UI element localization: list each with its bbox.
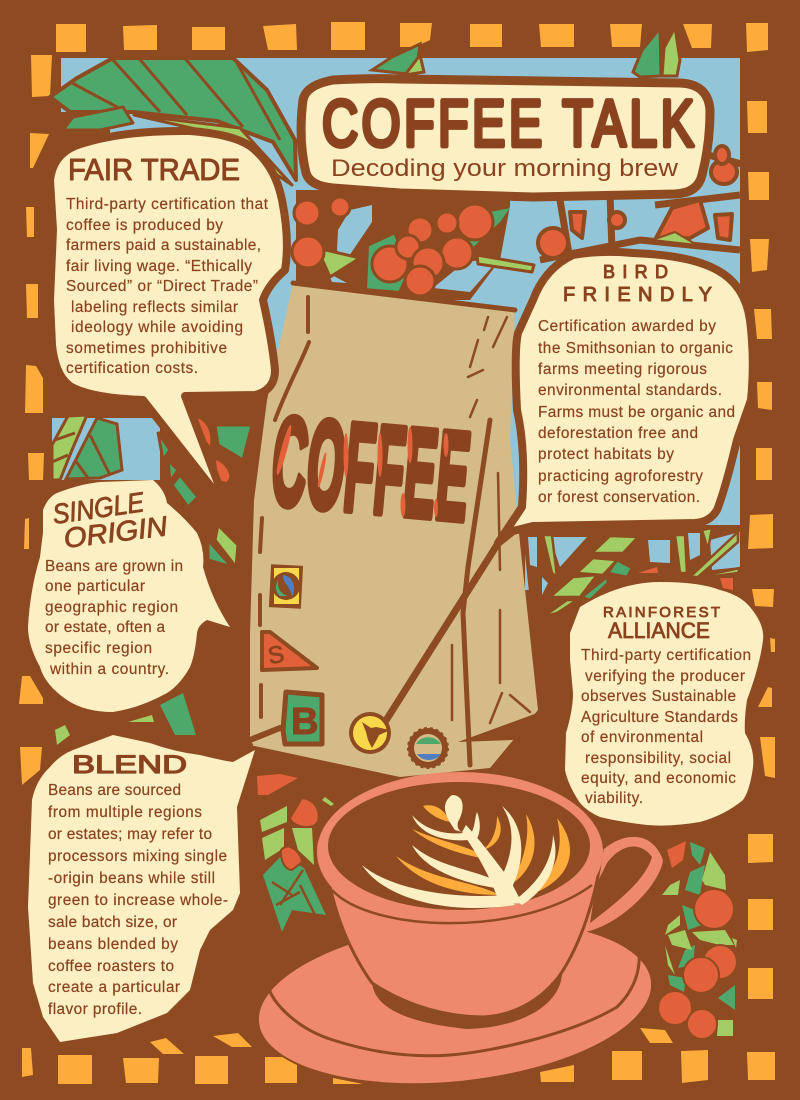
heading: rainforest alliance (603, 604, 720, 643)
panel: blend (28, 735, 255, 1042)
text: rainforest alliance description: observes Sustainable (581, 688, 736, 705)
text: blend description: beans blended by (48, 936, 178, 953)
text: single origin description: Beans are grown in (45, 558, 183, 575)
text: fair trade description: farmers paid a sustainable, (66, 237, 261, 254)
panel: title (301, 79, 710, 197)
text: blend description: -origin beans while still (48, 870, 215, 887)
text: rainforest alliance description: Agriculture Standards (581, 709, 738, 726)
text: blend description: flavor profile. (48, 1001, 142, 1018)
icon: bird friendly badge (349, 712, 391, 754)
text: fair trade description: ideology while avoiding (71, 319, 243, 336)
foliage: top left leaf (50, 56, 296, 418)
coffee bag (240, 283, 565, 777)
text: single origin description: specific region (45, 640, 152, 657)
text: single origin description: one particular (45, 578, 145, 595)
text: blend description: or estates; may refer to (48, 826, 212, 843)
text: bird friendly description: deforestation free and (538, 425, 698, 442)
text: blend description: create a particular (48, 979, 180, 996)
icon: blend badge: B (291, 701, 318, 743)
text: blend description: from multiple regions (48, 804, 202, 821)
icon: blend badge (283, 692, 322, 744)
foliage: beside blend (257, 774, 334, 932)
text: rainforest alliance description: verifying the producer (585, 668, 745, 685)
heading: single origin: SINGLE (51, 486, 146, 530)
heading: bird friendly: BIRD (603, 262, 668, 282)
text: bird friendly description (538, 318, 735, 506)
latte art (362, 795, 570, 908)
subtitle: Decoding your morning brew (331, 155, 679, 182)
text: bird friendly description: protect habitats by (538, 446, 674, 463)
text: rainforest alliance description: viability. (585, 790, 643, 807)
panel: fair trade (50, 131, 287, 507)
text: bird friendly description: environmental standards. (538, 382, 722, 399)
foliage: left lower leaves (52, 380, 300, 567)
text: blend description (48, 782, 228, 1018)
text: single origin description: within a country. (49, 661, 169, 678)
text: single origin description (45, 558, 183, 678)
icon: single origin badge: S (266, 641, 286, 670)
text: rainforest alliance description: responsibility, social (585, 750, 731, 767)
foliage: bottom right with berries (658, 841, 737, 1039)
text: fair trade description: Third-party certification that (66, 196, 269, 213)
foliage and berries: right branch (538, 146, 745, 260)
text: fair trade description (66, 196, 269, 377)
text: blend description: sale batch size, or (48, 914, 177, 931)
text: fair trade description: sometimes prohibitive (66, 340, 227, 357)
text: rainforest alliance description (581, 647, 751, 807)
text: bird friendly description: the Smithsonian to organic (538, 340, 733, 357)
text: rainforest alliance description: Third-party certification (581, 647, 751, 664)
panel: bird friendly (498, 252, 753, 543)
text: blend description: green to increase whole- (48, 892, 228, 909)
heading: fair trade: FAIR TRADE (68, 152, 240, 187)
foliage and berries: centre branch (292, 190, 534, 300)
text: fair trade description: certification costs. (66, 360, 198, 377)
text: fair trade description: coffee is produced by (66, 217, 223, 234)
coffee cup and saucer (250, 772, 663, 1100)
text: single origin description: geographic region (45, 599, 178, 616)
text: fair trade description: labeling reflects similar (71, 299, 238, 316)
heading: rainforest alliance: ALLIANCE (608, 618, 710, 643)
heading: single origin: ORIGIN (62, 510, 170, 554)
heading: bag lettering COFFEE: COFFEE (267, 391, 475, 548)
panel: rainforest alliance (565, 582, 763, 826)
heading: single origin (51, 486, 170, 554)
icon: fair trade badge (269, 564, 303, 609)
text: rainforest alliance description: equity, and economic (581, 770, 736, 787)
foliage: top leaves (372, 27, 680, 77)
text: blend description: processors mixing single (48, 848, 227, 865)
panel: single origin (28, 480, 230, 712)
sky background (52, 58, 740, 590)
text: blend description: Beans are sourced (48, 782, 181, 799)
text: rainforest alliance description: of environmental (581, 729, 703, 746)
text: blend description: coffee roasters to (48, 958, 174, 975)
text: bird friendly description: practicing agroforestry (538, 468, 703, 485)
text: bird friendly description: farms meeting rigorous (538, 361, 707, 378)
text: bird friendly description: Certification awarded by (538, 318, 716, 335)
text: bird friendly description: Farms must be organic and (538, 404, 735, 421)
heading: blend: BLEND (72, 751, 187, 779)
foliage: below single origin (55, 693, 196, 745)
text: fair trade description: Sourced” or “Direct Trade” (66, 278, 258, 295)
text: bird friendly description: or forest conservation. (538, 489, 700, 506)
heading: bird friendly: FRIENDLY (563, 284, 712, 306)
text: single origin description: or estate, often a (45, 619, 165, 636)
heading: bird friendly (563, 262, 712, 306)
text: fair trade description: fair living wage. “Ethically (66, 258, 252, 275)
foliage: right middle (522, 525, 745, 650)
heading: coffee talk: COFFEE TALK (322, 87, 694, 161)
heading: rainforest alliance: RAINFOREST (603, 604, 720, 621)
icon: rainforest alliance badge (408, 728, 448, 768)
icon: single origin badge (262, 632, 317, 670)
